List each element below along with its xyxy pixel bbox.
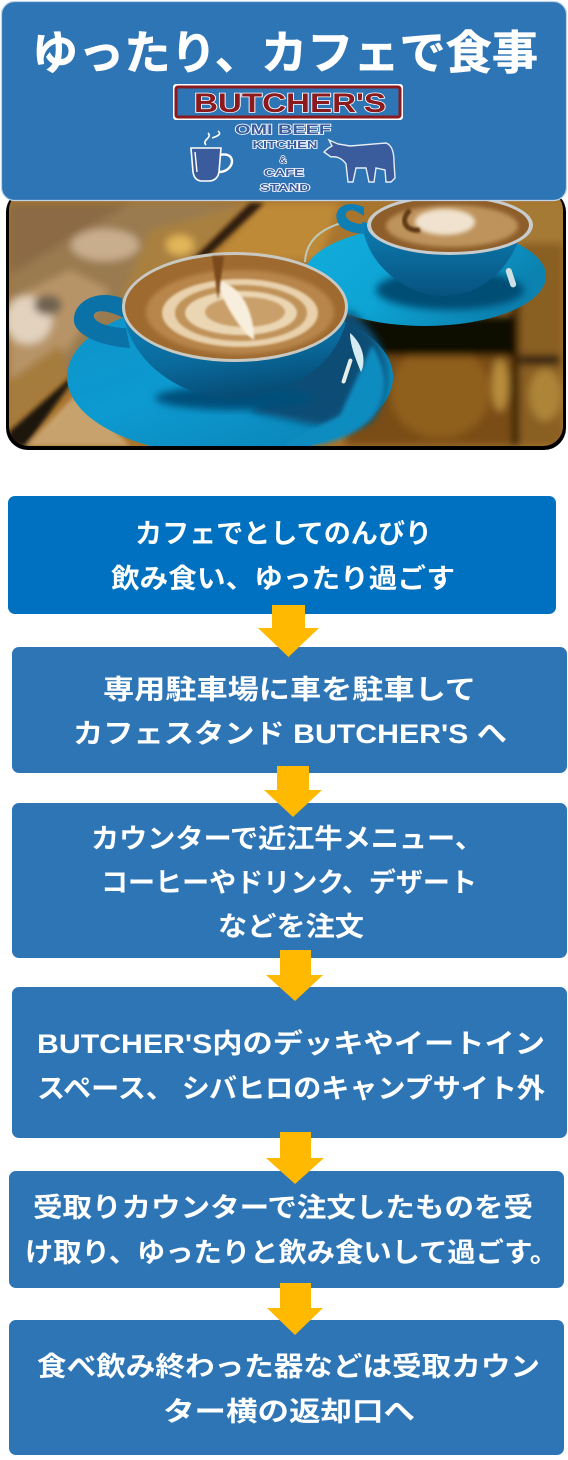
- step 5 panel: け取り、ゆったりと飲み食いして過ごす。: [25, 1237, 558, 1268]
- logo: BUTCHER'S sign: BUTCHER'S: [194, 88, 386, 118]
- step 6 panel: [9, 1320, 564, 1455]
- logo: text lines: KITCHEN: [252, 140, 318, 151]
- step 1 panel: カフェでとしてのんびり: [135, 519, 432, 549]
- step 2 panel: [12, 647, 567, 773]
- step 1 panel: [8, 496, 556, 614]
- step 6 panel: ター横の返却口へ: [163, 1397, 415, 1427]
- top centre plank: [210, 203, 340, 262]
- arrow 3: [266, 950, 323, 1001]
- step 3 panel: [12, 803, 567, 958]
- step 4 panel: スペース、 シバヒロのキャンプサイト外: [37, 1074, 545, 1104]
- step 2 panel: 専用駐車場に車を駐車して: [103, 675, 476, 705]
- arrow 4: [266, 1132, 324, 1184]
- step 5 panel: 受取りカウンターで注文したものを受: [33, 1193, 533, 1223]
- logo: text lines: STAND: [260, 183, 310, 194]
- arrow 1: [258, 605, 319, 657]
- step 1 panel: 飲み食い、ゆったり過ごす: [111, 563, 455, 594]
- logo: text lines: CAFE: [264, 168, 304, 179]
- arrow 2: [264, 766, 322, 817]
- logo: BUTCHER'S sign: [173, 84, 403, 120]
- left plank: [9, 201, 242, 372]
- step 3 panel: コーヒーやドリンク、デザート: [101, 867, 477, 898]
- step 5 panel: [9, 1171, 564, 1288]
- arrow 5: [267, 1283, 323, 1335]
- step 3 panel: カウンターで近江牛メニュー、: [91, 824, 483, 854]
- logo: text lines: [235, 121, 332, 194]
- icon: coffee cup: [191, 131, 232, 181]
- step 2 panel: カフェスタンド BUTCHER'S へ: [73, 719, 507, 749]
- step 4 panel: BUTCHER'S内のデッキやイートイン: [37, 1028, 545, 1059]
- front cup: [67, 252, 393, 456]
- step 3 panel: などを注文: [218, 912, 364, 942]
- logo: text lines: &: [279, 155, 287, 166]
- step 4 panel: [12, 987, 567, 1138]
- photo: latte cups on wooden table: [4, 190, 566, 456]
- title: ゆったり、カフェで食事: [32, 27, 538, 79]
- right planks: [342, 348, 520, 446]
- icon: cow: [324, 140, 395, 182]
- header panel: [2, 2, 566, 200]
- step 6 panel: 食べ飲み終わった器などは受取カウン: [37, 1352, 540, 1382]
- logo: text lines: OMI BEEF: [235, 121, 332, 137]
- back cup: [304, 195, 546, 326]
